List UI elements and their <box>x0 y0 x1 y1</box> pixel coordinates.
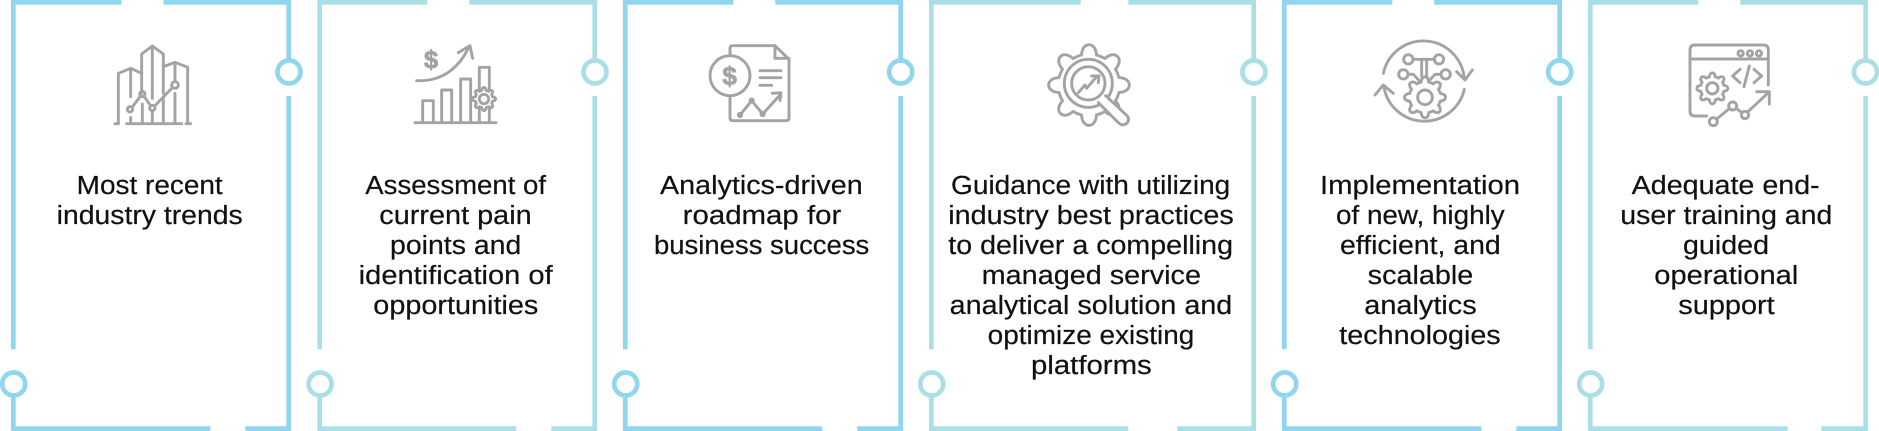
text: end-user training and support: guided <box>1683 232 1769 260</box>
text: most recent industry trends <box>57 172 243 230</box>
text: implementation of analytics technologies <box>1320 172 1520 350</box>
text: analytics-driven roadmap <box>654 172 869 260</box>
text: analytics-driven roadmap: business success <box>654 232 869 260</box>
text: end-user training and support <box>1620 172 1832 320</box>
text: analytics-driven roadmap: roadmap for <box>683 202 842 230</box>
text: implementation of analytics technologies: efficient, and <box>1340 232 1501 260</box>
panel frame with connector rings <box>614 2 912 429</box>
text: implementation of analytics technologies: scalable <box>1368 262 1473 290</box>
text: most recent industry trends: Most recent <box>77 172 223 200</box>
icon: gear with magnifier and chart <box>1049 45 1129 125</box>
text: end-user training and support: operational <box>1654 262 1798 290</box>
text: guidance with best practices: managed service <box>982 262 1201 290</box>
panel: most recent industry trends <box>2 2 300 429</box>
text: assessment of current pain points: Assessment of <box>365 172 547 200</box>
text: implementation of analytics technologies: Implementation <box>1320 172 1520 200</box>
text: end-user training and support: Adequate end- <box>1632 172 1820 200</box>
text: guidance with best practices <box>948 172 1234 380</box>
panel frame with connector rings <box>1273 2 1571 429</box>
text: most recent industry trends: industry trends <box>57 202 243 230</box>
panel: end-user training and support <box>1579 2 1877 429</box>
text: end-user training and support: user training and <box>1620 202 1832 230</box>
panel frame with connector rings <box>920 2 1265 429</box>
icon: financial report document <box>710 46 789 121</box>
panel: implementation of analytics technologies <box>1273 2 1571 429</box>
text: assessment of current pain points: identification of <box>359 262 554 290</box>
text: assessment of current pain points: points and <box>390 232 521 260</box>
panel: guidance with best practices <box>920 2 1265 429</box>
panel: assessment of current pain points <box>309 2 606 429</box>
icon: cycle arrows with gear and circuit <box>1375 41 1472 121</box>
text: guidance with best practices: Guidance with utilizing <box>951 172 1230 200</box>
text: assessment of current pain points: current pain <box>379 202 532 230</box>
text: guidance with best practices: platforms <box>1031 352 1152 380</box>
text: guidance with best practices: industry best practices <box>948 202 1234 230</box>
panel: analytics-driven roadmap <box>614 2 912 429</box>
text: analytics-driven roadmap: Analytics-driven <box>660 172 863 200</box>
text: assessment of current pain points: opportunities <box>373 292 538 320</box>
text: guidance with best practices: optimize existing <box>988 322 1194 350</box>
text: implementation of analytics technologies: analytics <box>1364 292 1477 320</box>
icon: financial report document: $ <box>722 61 737 91</box>
panel frame with connector rings <box>309 2 606 429</box>
text: end-user training and support: support <box>1678 292 1775 320</box>
icon: bar chart with dollar, arrow and gear: $ <box>424 46 438 74</box>
text: guidance with best practices: to deliver a compelling <box>948 232 1233 260</box>
text: assessment of current pain points <box>359 172 554 320</box>
icon: browser window with code, gear and chart <box>1690 45 1769 126</box>
icon: city buildings with trend line <box>115 46 191 124</box>
text: guidance with best practices: analytical solution and <box>950 292 1232 320</box>
text: implementation of analytics technologies: technologies <box>1339 322 1501 350</box>
panel frame with connector rings <box>1579 2 1877 429</box>
text: implementation of analytics technologies: of new, highly <box>1336 202 1505 230</box>
icon: bar chart with dollar, arrow and gear <box>415 46 496 123</box>
panel frame with connector rings <box>2 2 300 429</box>
